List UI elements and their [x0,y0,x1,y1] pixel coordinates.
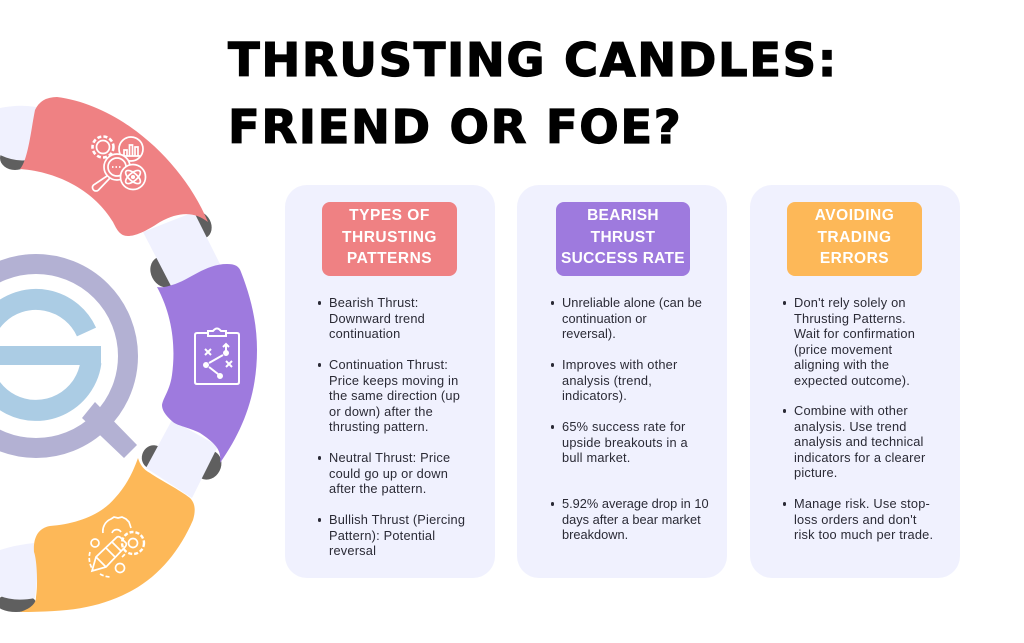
title: THRUSTING CANDLES: [228,33,838,87]
heading: avoiding trading errors: AVOIDING [815,207,894,224]
heading: types of thrusting patterns [322,202,457,276]
text: don't rely solely: aligning with the [794,357,889,372]
text: improves with analysis: Improves with other [562,357,677,372]
text: manage risk [794,496,933,543]
logo: Q ring and G mark [0,264,137,458]
text: don't rely solely: Wait for confirmation [794,326,915,341]
heading: bearish thrust success rate [556,202,690,276]
panel: avoiding trading errors [750,185,960,578]
text: continuation thrust: thrusting pattern. [329,419,429,434]
text: continuation thrust [329,357,460,435]
text: improves with analysis: analysis (trend, [562,373,652,388]
text: bullish thrust [329,512,465,559]
text: combine with analysis: analysis and technical [794,434,924,449]
text: improves with analysis [562,357,677,404]
text: continuation thrust: Price keeps moving in [329,373,458,388]
text: 5.92% average drop: 5.92% average drop in 10 [562,496,709,511]
heading: bearish thrust success rate: THRUST [591,228,655,246]
text: combine with analysis [794,403,925,481]
heading: avoiding trading errors: ERRORS [820,250,889,267]
heading: types of thrusting patterns: THRUSTING [342,228,437,246]
text: 65% success rate: upside breakouts in a [562,435,688,450]
text: combine with analysis: picture. [794,465,838,480]
text: combine with analysis: Combine with other [794,403,908,418]
icon: pencil and gears [89,517,144,577]
panel: types of thrusting patterns [285,185,495,578]
text: 65% success rate: bull market. [562,450,631,465]
text: 5.92% average drop [562,496,709,543]
text: bearish thrust: continuation [329,326,400,341]
title: FRIEND OR FOE? [228,100,682,154]
text: manage risk: loss orders and don't [794,512,917,527]
text: don't rely solely: expected outcome). [794,373,910,388]
text: unreliable alone: reversal). [562,326,616,341]
connector: top left [0,106,36,170]
text: 65% success rate: 65% success rate for [562,419,686,434]
text: improves with analysis: indicators). [562,388,627,403]
text: continuation thrust: Continuation Thrust: [329,357,448,372]
heading: bearish thrust success rate: SUCCESS RATE [561,250,685,267]
heading: types of thrusting patterns: TYPES OF [349,207,430,224]
text: don't rely solely: (price movement [794,342,892,357]
heading: bearish thrust success rate: BEARISH [587,207,659,224]
text: combine with analysis: indicators for a clearer [794,450,925,465]
icon: gear, chart, magnifier and atom [92,136,146,191]
ribbon segment: red [20,97,208,236]
text: bullish thrust: reversal [329,543,376,558]
text: bearish thrust [329,295,425,342]
text: manage risk: Manage risk. Use stop- [794,496,930,511]
text: 65% success rate [562,419,688,466]
text: don't rely solely: Thrusting Patterns. [794,311,906,326]
text: bullish thrust: Bullish Thrust (Piercing [329,512,465,527]
icon: clipboard strategy plan [195,328,239,384]
text: unreliable alone: continuation or [562,311,647,326]
text: bearish thrust: Bearish Thrust: [329,295,419,310]
text: bearish thrust: Downward trend [329,311,425,326]
text: neutral thrust: after the pattern. [329,481,427,496]
ribbon segment: orange [20,458,195,612]
ribbon segment: purple [157,264,257,463]
title [228,33,838,154]
text: manage risk: risk too much per trade. [794,527,933,542]
text: 5.92% average drop: days after a bear market [562,512,701,527]
text: bullish thrust: Pattern): Potential [329,528,435,543]
text: unreliable alone [562,295,702,342]
text: neutral thrust: could go up or down [329,466,448,481]
connector: red to purple [143,208,221,292]
text: combine with analysis: analysis. Use trend [794,419,907,434]
connector: purple to orange [138,420,226,498]
heading: types of thrusting patterns: PATTERNS [347,250,432,267]
text: don't rely solely: Don't rely solely on [794,295,906,310]
text: don't rely solely [794,295,915,389]
text: unreliable alone: Unreliable alone (can be [562,295,702,310]
connector: bottom left [0,543,38,612]
text: continuation thrust: or down) after the [329,404,433,419]
text: neutral thrust [329,450,450,497]
heading: avoiding trading errors [787,202,922,276]
panel: bearish thrust success rate [517,185,727,578]
text: neutral thrust: Neutral Thrust: Price [329,450,450,465]
ribbon ring with logo and icons [0,97,257,612]
text: 5.92% average drop: breakdown. [562,527,628,542]
text: continuation thrust: the same direction (up [329,388,460,403]
heading: avoiding trading errors: TRADING [817,228,892,246]
